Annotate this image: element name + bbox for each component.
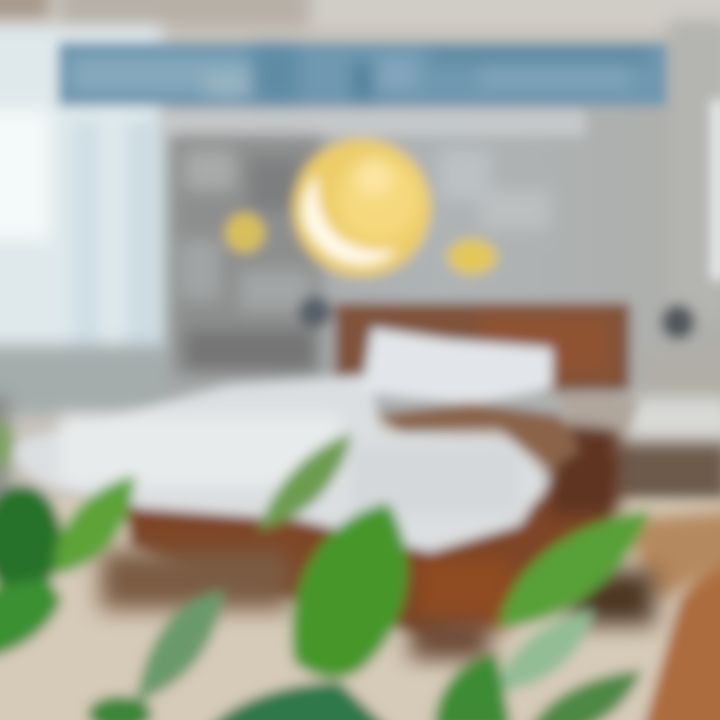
floor bbox=[0, 395, 720, 720]
leaf: top left tip bbox=[0, 421, 13, 469]
nightstand bbox=[615, 350, 720, 502]
light strip below title bbox=[160, 110, 585, 136]
leaf: lower centre dark bbox=[200, 682, 400, 720]
shelves on wall bbox=[172, 136, 550, 376]
pillows bbox=[362, 328, 552, 404]
bed throw bbox=[375, 392, 640, 470]
window with curtains bbox=[0, 26, 170, 415]
bed frame bbox=[100, 425, 655, 660]
icon: small right star bbox=[447, 239, 497, 275]
leaf: bottom right bbox=[434, 653, 512, 720]
leaf: right bright bbox=[498, 510, 650, 628]
mattress and duvet bbox=[12, 375, 548, 552]
leaf: left large dark bbox=[0, 485, 62, 595]
leaf: left bright bbox=[55, 475, 135, 575]
icon: small left star bbox=[225, 213, 265, 253]
leaf: right pale bbox=[496, 610, 594, 692]
leaf: left lower bbox=[0, 578, 62, 660]
leaf: stem middle bbox=[258, 433, 352, 530]
right lamp bbox=[661, 304, 695, 340]
leaf: lower left pale bbox=[136, 590, 224, 702]
leaf: central large bbox=[292, 503, 408, 678]
left lamp bbox=[298, 296, 332, 328]
icon: moon in glowing circle bbox=[293, 139, 431, 277]
leaf: bottom right far bbox=[528, 670, 642, 720]
title banner bbox=[58, 42, 668, 106]
foreground plant leaves bbox=[0, 421, 650, 720]
headboard bbox=[335, 303, 630, 391]
leaf: bottom left dark bbox=[88, 696, 152, 720]
